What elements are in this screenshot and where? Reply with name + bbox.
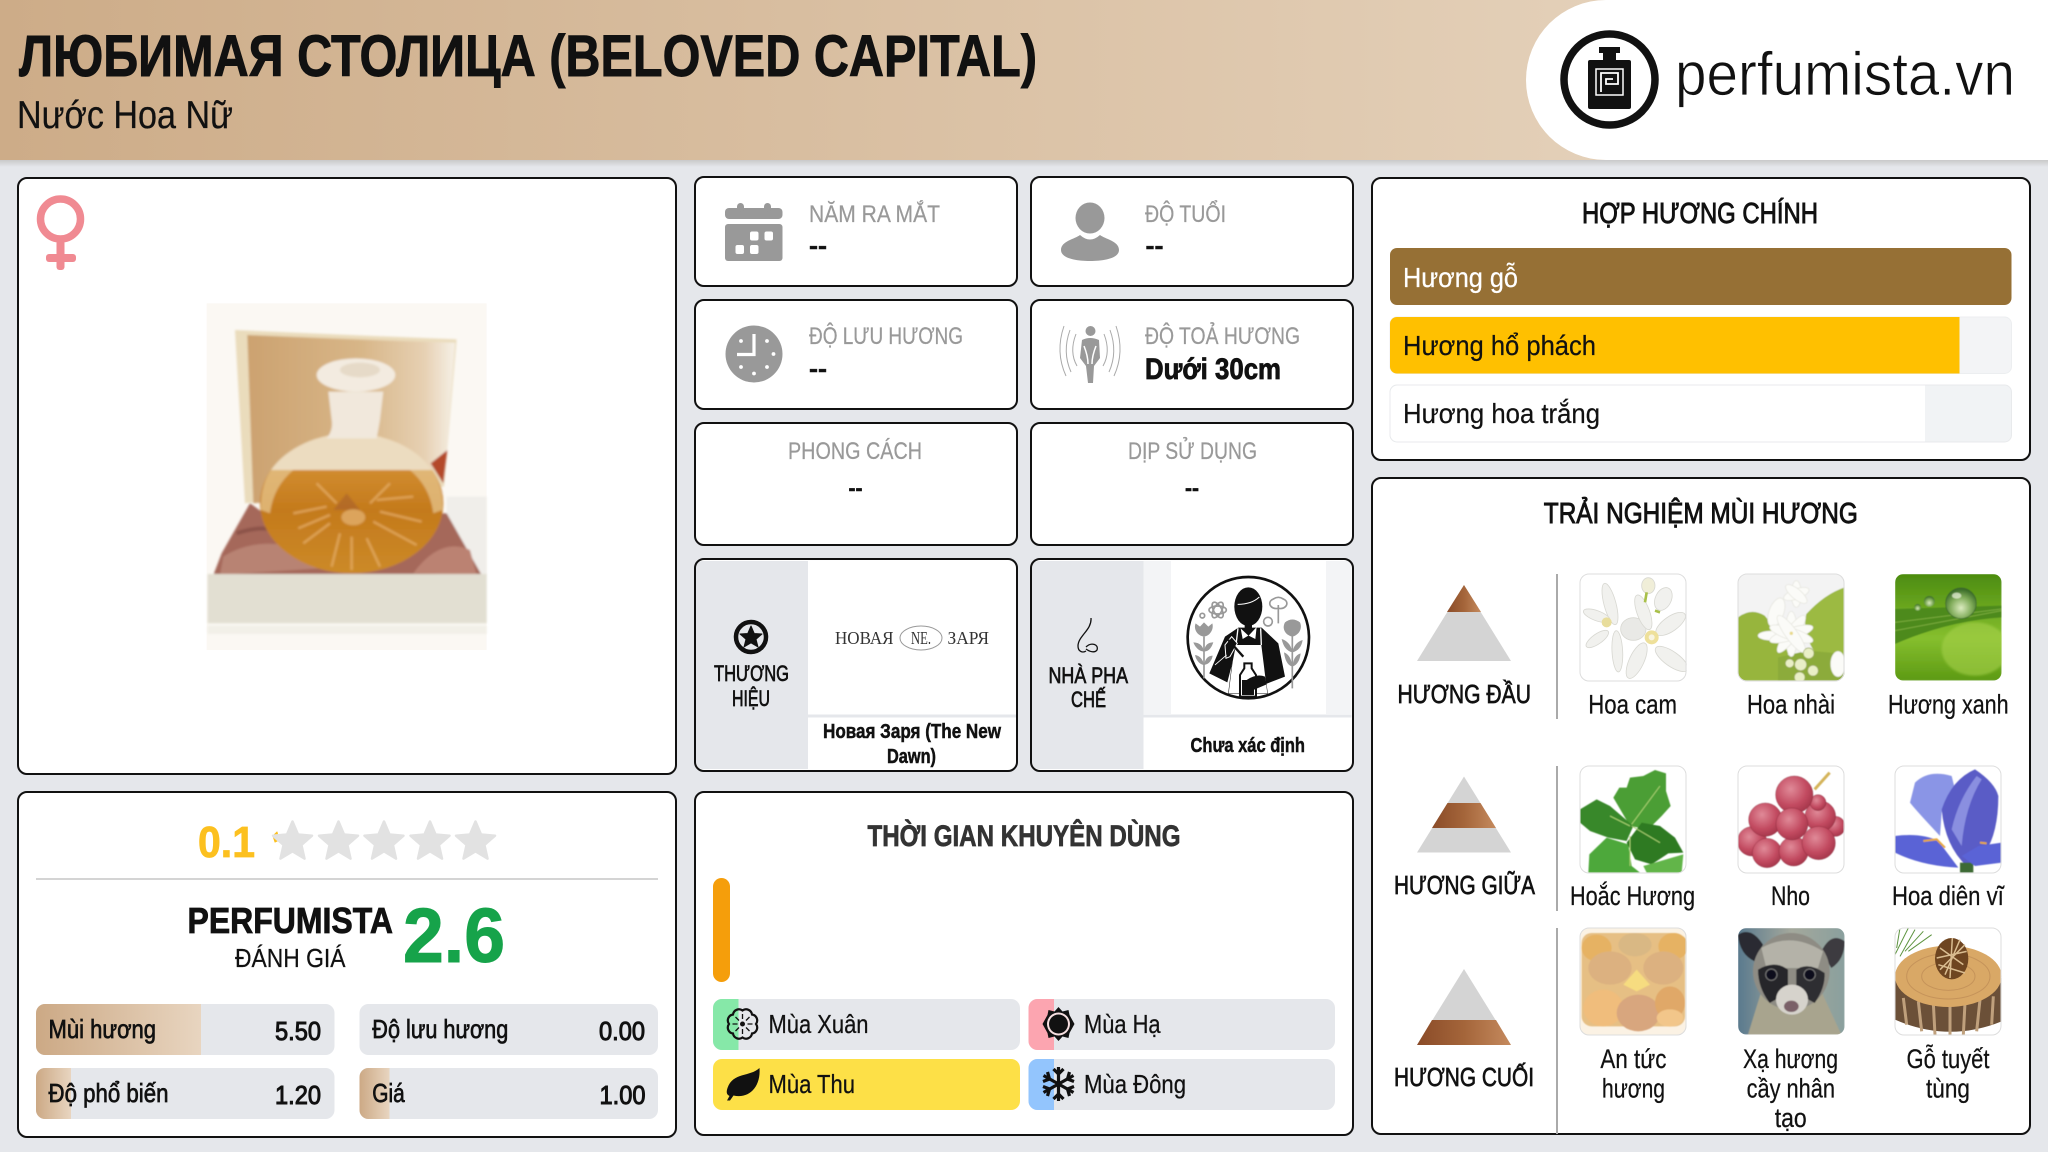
icon: star badge xyxy=(736,622,766,652)
season: autumn: Mùa Thu xyxy=(768,1069,855,1099)
note: grape xyxy=(1737,766,1845,911)
label: DỊP SỬ DỤNG xyxy=(1128,436,1257,465)
card: perfumer: CHẾ xyxy=(1071,687,1106,712)
card: release year xyxy=(695,177,1017,286)
top notes pyramid xyxy=(1398,585,1531,709)
label: PHONG CÁCH xyxy=(788,438,922,465)
logo: perfumista.vn: perfumista.vn xyxy=(1675,40,2015,108)
note: cedar: Gỗ tuyết xyxy=(1906,1043,1990,1074)
middle notes pyramid xyxy=(1394,776,1536,900)
label: ĐỘ TOẢ HƯƠNG xyxy=(1145,321,1300,350)
accord: woody: Hương gỗ xyxy=(1403,262,1518,293)
icon: female symbol xyxy=(40,199,80,270)
note: civet musk: tạo xyxy=(1775,1103,1807,1133)
panel: recommended time xyxy=(695,792,1353,1135)
season: summer: Mùa Hạ xyxy=(1084,1009,1161,1039)
note: patchouli: Hoắc Hương xyxy=(1570,880,1695,911)
card: age xyxy=(1031,177,1353,286)
day/night bar xyxy=(713,878,730,982)
metric: scent: Mùi hương xyxy=(48,1014,156,1044)
card: brand xyxy=(695,559,1017,771)
perfumista score: 2.6 xyxy=(403,893,505,979)
panel: perfume photo xyxy=(18,178,676,774)
header banner xyxy=(0,0,2048,167)
label: NĂM RA MẮT xyxy=(809,200,940,228)
icon: person xyxy=(1061,202,1119,261)
star rating xyxy=(273,822,495,859)
card: longevity xyxy=(695,300,1017,409)
note: orange blossom: Hoa cam xyxy=(1588,690,1677,720)
note: iris: Hoa diên vĩ xyxy=(1892,881,2005,911)
value: -- xyxy=(848,476,862,500)
heading: HỢP HƯƠNG CHÍNH xyxy=(1582,197,1818,230)
note: iris xyxy=(1892,766,2005,911)
note: civet musk xyxy=(1738,928,1845,1133)
metric: longevity: Độ lưu hương xyxy=(372,1014,508,1044)
community score: 0.1 xyxy=(198,818,255,867)
metric: longevity xyxy=(360,1004,658,1055)
panel: main accords xyxy=(1372,178,2030,460)
icon: scent radius xyxy=(1060,326,1120,383)
note: cedar xyxy=(1895,928,2002,1104)
icon: nose xyxy=(1078,618,1097,652)
perfumista rating label: PERFUMISTA xyxy=(188,900,393,941)
card: perfumer xyxy=(1031,559,1353,771)
metric: scent: 5.50 xyxy=(275,1016,321,1046)
perfumer illustration xyxy=(1188,577,1309,698)
note: green accord: Hương xanh xyxy=(1888,690,2009,720)
value: Dưới 30cm xyxy=(1145,353,1281,386)
card: brand: Dawn) xyxy=(887,746,936,768)
icon: calendar xyxy=(725,203,782,261)
season: spring xyxy=(713,999,1020,1050)
note: cedar: tùng xyxy=(1926,1074,1970,1104)
note: patchouli xyxy=(1570,766,1695,911)
note: green accord xyxy=(1888,574,2009,720)
top notes pyramid: HƯƠNG ĐẦU xyxy=(1398,679,1531,709)
perfume bottle in box xyxy=(207,303,487,650)
accord: woody xyxy=(1390,248,2012,305)
brand logo: NE. xyxy=(911,628,931,648)
card: occasion xyxy=(1031,423,1353,545)
accord: amber: Hương hổ phách xyxy=(1403,330,1596,361)
metric: popularity: Độ phổ biến xyxy=(48,1078,168,1108)
value: -- xyxy=(1185,476,1199,500)
icon: clock xyxy=(726,326,782,382)
title: ЛЮБИМАЯ СТОЛИЦА (BELOVED CAPITAL) xyxy=(19,24,1037,89)
heading: TRẢI NGHIỆM MÙI HƯƠNG xyxy=(1544,496,1858,530)
note: benzoin xyxy=(1580,928,1688,1104)
accord: white floral xyxy=(1390,385,2012,442)
subtitle: Nước Hoa Nữ xyxy=(17,94,233,137)
heading: THỜI GIAN KHUYÊN DÙNG xyxy=(868,819,1180,853)
metric: longevity: 0.00 xyxy=(599,1016,645,1046)
note: benzoin: An tức xyxy=(1600,1044,1666,1074)
panel: ratings xyxy=(18,792,676,1137)
note: civet musk: cầy nhân xyxy=(1747,1074,1835,1104)
season: winter: Mùa Đông xyxy=(1084,1069,1186,1099)
note: jasmine xyxy=(1738,574,1845,720)
metric: price: 1.00 xyxy=(600,1080,646,1110)
brand logo: НОВАЯ xyxy=(835,628,894,648)
season: spring: Mùa Xuân xyxy=(768,1009,868,1039)
metric: scent xyxy=(36,1004,334,1055)
note: benzoin: hương xyxy=(1602,1074,1665,1104)
brand logo: ЗАРЯ xyxy=(948,628,989,648)
metric: price: Giá xyxy=(372,1078,405,1108)
label: ĐỘ LƯU HƯƠNG xyxy=(809,322,963,350)
card: projection xyxy=(1031,300,1353,409)
base notes pyramid: HƯƠNG CUỐI xyxy=(1394,1062,1534,1092)
card: brand: HIỆU xyxy=(732,686,770,711)
perfumer name: Chưa xác định xyxy=(1190,735,1305,757)
note: jasmine: Hoa nhài xyxy=(1747,690,1835,720)
value: -- xyxy=(809,356,827,383)
season: summer xyxy=(1028,999,1335,1050)
middle notes pyramid: HƯƠNG GIỮA xyxy=(1394,870,1536,900)
season: autumn xyxy=(713,1059,1020,1110)
value: -- xyxy=(1146,233,1164,260)
label: THƯƠNG xyxy=(714,661,789,686)
accord: white floral: Hương hoa trắng xyxy=(1403,398,1600,429)
brand logo xyxy=(835,626,989,650)
note: civet musk: Xạ hương xyxy=(1743,1044,1838,1074)
accord: amber xyxy=(1390,317,2012,374)
panel: ratings: ĐÁNH GIÁ xyxy=(235,943,346,973)
label: ĐỘ TUỔI xyxy=(1145,200,1226,228)
label: NHÀ PHA xyxy=(1048,663,1128,688)
panel: scent experience xyxy=(1372,478,2030,1134)
metric: popularity: 1.20 xyxy=(275,1080,321,1110)
note: grape: Nho xyxy=(1771,881,1810,911)
value: -- xyxy=(809,233,827,260)
note: orange blossom xyxy=(1580,574,1692,720)
metric: price xyxy=(360,1068,658,1119)
logo: perfumista.vn xyxy=(1526,0,2048,160)
base notes pyramid xyxy=(1394,969,1534,1092)
season: winter xyxy=(1028,1059,1335,1110)
card: style xyxy=(695,423,1017,545)
brand name: Новая Заря (The New xyxy=(823,721,1001,743)
metric: popularity xyxy=(36,1068,334,1119)
